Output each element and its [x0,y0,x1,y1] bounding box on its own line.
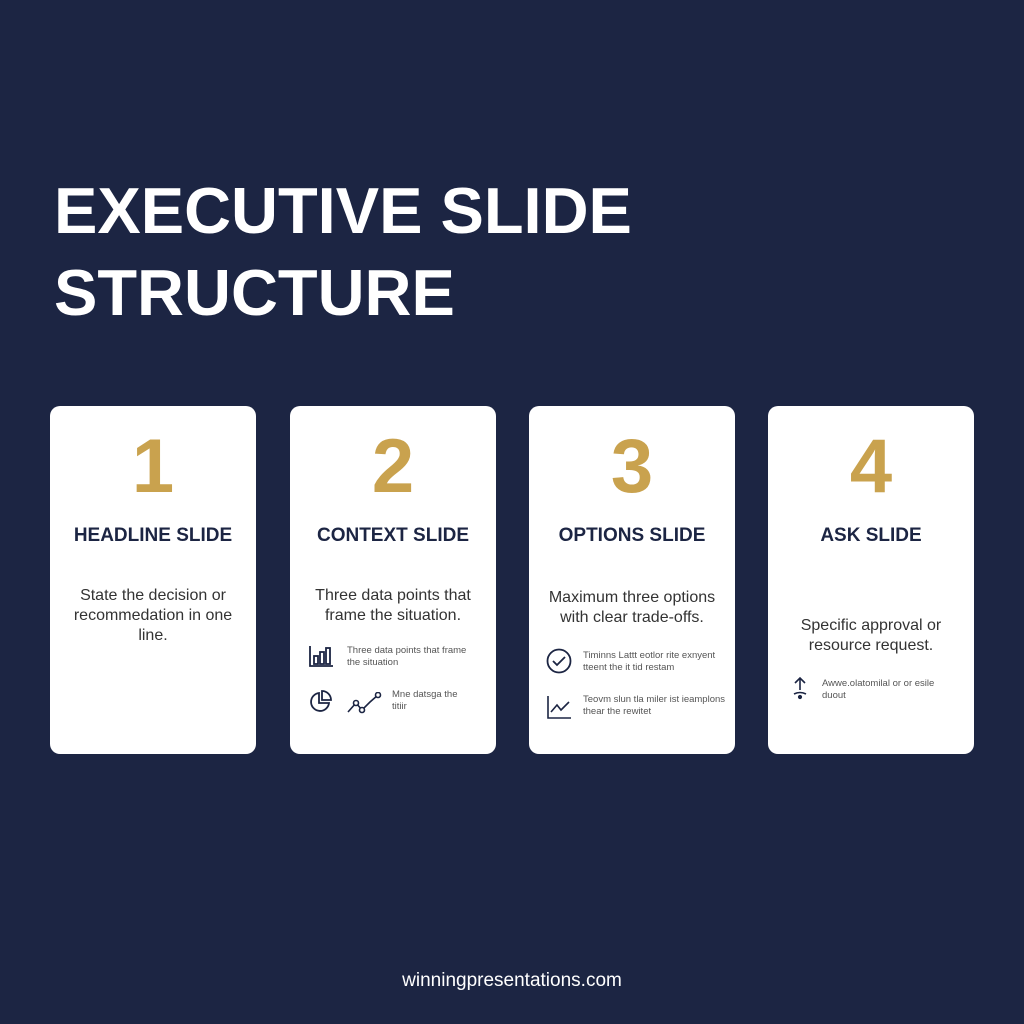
card 3: options slide: thear the rewitet [583,706,651,717]
card 2: context slide: 2 [372,424,414,509]
card 4: ask slide: ASK SLIDE [820,525,922,546]
icon: bar chart [309,646,333,667]
card 2: context slide: Three data points that frame the situation. [315,587,471,624]
card 4: ask slide: Specific approval or resource request. [801,617,941,654]
card 2: context slide: the situation [347,657,398,668]
title [54,174,632,329]
footer: winningpresentations.com [402,970,622,991]
card 3: options slide: OPTIONS SLIDE [559,525,705,546]
icon: upload arrow [794,677,806,700]
card 4: ask slide [768,406,974,754]
icon: line chart [348,692,382,714]
card 2: context slide [290,406,496,754]
card 1: headline slide: 1 [132,424,174,509]
title: EXECUTIVE SLIDE [54,174,632,247]
icon: trend chart [547,696,571,719]
card 4: ask slide: duout [822,690,846,701]
card 3: options slide: Timinns Lattt eotlor rite exnyent [583,650,715,661]
card 2: context slide: CONTEXT SLIDE [317,525,469,546]
card 3: options slide: 3 [611,424,653,509]
card 3: options slide: Teovm slun tla miler ist ieamplons [583,694,725,705]
card 1: headline slide: HEADLINE SLIDE [74,525,232,546]
card 1: headline slide: State the decision or recommedation in one line. [74,587,232,644]
card 4: ask slide: 4 [850,424,892,509]
icon: pie chart [310,690,332,712]
icon: check circle [546,648,572,674]
card 3: options slide: Maximum three options with clear trade-offs. [549,589,715,626]
card 2: context slide: Mne datsga the [392,689,458,700]
card 3: options slide [529,406,735,754]
card 3: options slide: tteent the it tid restam [583,662,674,673]
card 2: context slide: Three data points that frame [347,645,466,656]
title: STRUCTURE [54,256,455,329]
card 2: context slide: titiir [392,701,407,712]
card 4: ask slide: Awwe.olatomilal or or esile [822,678,934,689]
card 1: headline slide [50,406,256,754]
